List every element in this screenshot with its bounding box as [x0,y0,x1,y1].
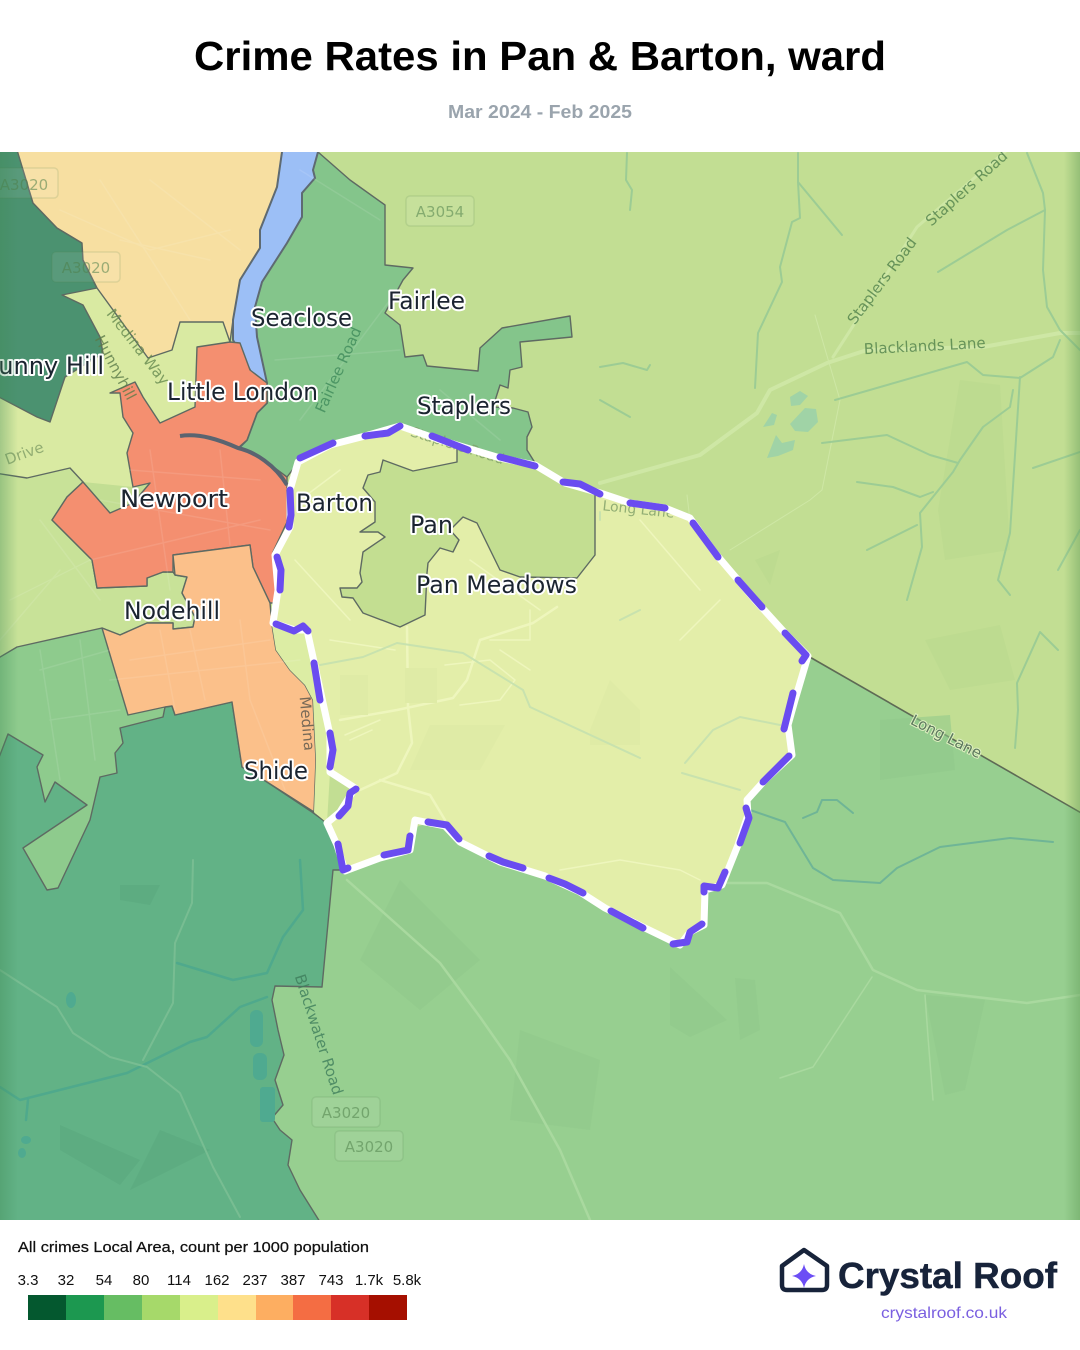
area: Nodehill and Shide orange [102,545,316,812]
area: west green [0,628,164,890]
icon: house outline [782,1250,827,1290]
area: Newport red-orange [52,342,287,603]
area: Staplers and Seaclose green [238,140,572,477]
subtitle: date range: Mar 2024 - Feb 2025 [448,102,632,122]
label: Staplers Road under boundary: Staplers Road [408,424,506,468]
labels: road names [2,147,1011,1097]
road shield: A3020 south 2 [335,1131,403,1161]
label: Staplers Road 1: Staplers Road [844,234,920,328]
legend tick values: 387 [280,1272,306,1289]
ponds [763,391,818,458]
label: Nodehill: Nodehill [124,597,220,625]
area: dark green north-west [0,140,103,422]
legend title: All crimes Local Area, count per 1000 population [18,1239,369,1256]
legend tick values: 80 [133,1272,149,1289]
ward boundary: white underlay [273,426,808,945]
label: Pan: Pan [410,511,453,539]
north-east streams [600,153,1080,748]
label: Shide: Shide [244,757,308,785]
label: Newport: Newport [120,485,228,513]
river [233,140,320,447]
logo url: crystalroof.co.uk [881,1305,1008,1322]
label: Staplers: Staplers [417,392,511,420]
farmland patches [755,380,1015,690]
label: Little London: Little London [167,378,318,406]
Long Lane boundary [808,656,1080,818]
south-east stream [750,800,1053,883]
label: Long Lane under boundary: Long Lane [602,498,675,522]
legend tick values: 32 [58,1272,74,1289]
south patches [916,715,952,740]
area: north yellow [14,140,285,358]
light roads [600,150,1080,550]
place labels [0,287,577,785]
label: Medina: Medina [296,696,318,752]
logo wordmark: Crystal Roof [838,1255,1058,1296]
ward boundary: purple dashes [276,426,806,944]
legend tick values: 114 [167,1272,191,1289]
road shield: A3020 top-left: A3020 [0,176,48,194]
road shield: A3020 upper [52,252,120,282]
south-west streams and ponds [0,860,303,1217]
area: south-east green [272,656,1080,1230]
road shield: A3054: A3054 [416,203,464,221]
label: Barton: Barton [296,489,373,517]
road shield: A3020 top-left [0,168,58,198]
label: Long Lane east: Long Lane [908,711,985,762]
logo: Crystal Roof [782,1250,1058,1322]
label: Staplers Road 2: Staplers Road [922,147,1011,230]
road shield: A3054 [406,196,474,226]
legend tick values [18,1272,422,1289]
ward streams [320,512,780,790]
road shield: A3020 south 1: A3020 [322,1104,370,1122]
area: Pan inner green [340,445,595,627]
legend tick values: 237 [242,1272,268,1289]
area: Pan and Barton yellow ward [273,426,808,945]
label: Pan Meadows: Pan Meadows [416,571,577,599]
label: Blacklands Lane: Blacklands Lane [863,334,986,358]
legend tick values: 1.7k [355,1272,384,1289]
legend [18,1239,422,1320]
river weir dark stroke [180,435,287,485]
legend tick values: 743 [318,1272,344,1289]
legend colour scale [28,1295,407,1320]
label: Medina Way: Medina Way [103,305,173,389]
title: Crime Rates in Pan & Barton, ward [194,33,886,79]
road shield: A3020 upper: A3020 [62,259,110,277]
area: Nodehill light green [0,468,195,660]
legend tick values: 162 [204,1272,230,1289]
label: Drive: Drive [2,438,46,469]
label: Seaclose: Seaclose [251,304,352,332]
legend tick values: 5.8k [393,1272,422,1289]
map base: rural north-east area [84,152,1080,826]
road shield: A3020 south 1 [312,1097,380,1127]
area: left light green (Hunny Hill) [0,288,230,487]
label: Hunnyhill: Hunnyhill [91,332,140,403]
map edge shading [0,152,1080,1220]
ward streets [295,470,720,880]
legend tick values: 3.3 [18,1272,38,1289]
south-west patches [60,885,210,1190]
town roads [0,170,500,790]
road shield: A3020 south 2: A3020 [345,1138,393,1156]
label: Fairlee: Fairlee [388,287,465,315]
legend tick values: 54 [96,1272,112,1289]
icon: four-point star [792,1264,816,1288]
label: Blackwater Road: Blackwater Road [291,972,347,1097]
south roads [347,880,1080,1220]
area: south-west dark green [0,702,343,1230]
label: Fairlee Road: Fairlee Road [312,324,365,416]
strip between Shide and ward [272,625,330,823]
